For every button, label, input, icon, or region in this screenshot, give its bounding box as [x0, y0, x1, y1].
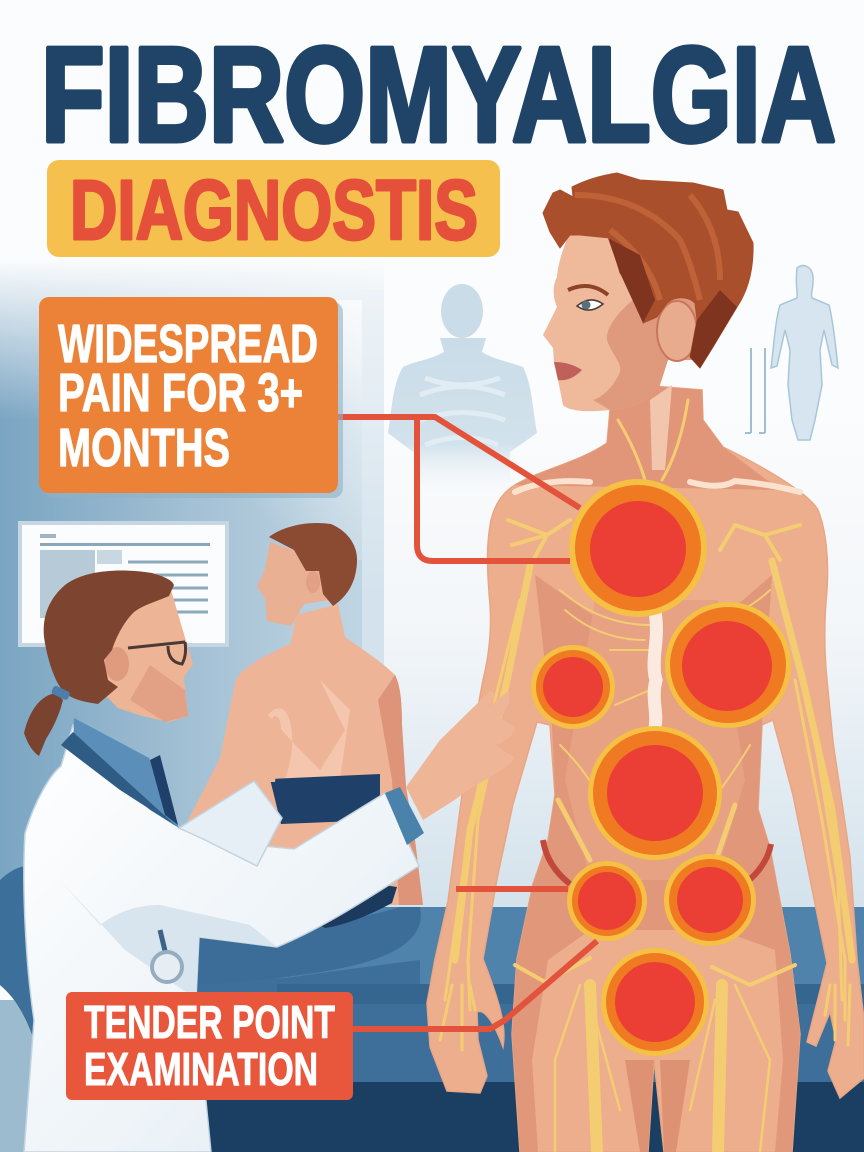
spine [654, 612, 656, 728]
cheek shadow [593, 290, 700, 410]
stethoscope chestpiece [152, 930, 182, 982]
patient face [257, 542, 330, 626]
ghost figure: full body small [745, 266, 838, 440]
callout: widespread pain: PAIN FOR 3+ [58, 363, 303, 423]
wall chart [20, 523, 227, 645]
torso shading [512, 575, 800, 1152]
glasses [128, 642, 186, 664]
pelvic band [543, 840, 771, 884]
callout: tender point examination: EXAMINATION [84, 1043, 318, 1095]
connector lines [338, 417, 597, 1029]
callout: widespread pain: MONTHS [58, 418, 230, 478]
patient hair [269, 523, 357, 606]
subtitle badge: DIAGNOSTIS [70, 163, 478, 257]
tender point 2 [665, 602, 791, 728]
neck shading [515, 385, 780, 490]
patient ear [306, 571, 320, 593]
tender point 3 [531, 645, 615, 729]
pain markers on body [531, 479, 791, 1056]
face [543, 225, 705, 411]
coat shadow folds [60, 880, 277, 999]
blue cuff [385, 787, 424, 845]
patient [184, 523, 423, 928]
shirt and collar [73, 718, 179, 828]
tender point 7 [601, 948, 709, 1056]
callout: widespread pain [39, 297, 343, 498]
waist cloth [270, 774, 380, 824]
doctor hand [406, 691, 515, 820]
ghost figure: torso behind [388, 284, 537, 490]
far sleeve [179, 781, 282, 866]
ponytail [24, 693, 63, 756]
examination table [0, 866, 864, 1152]
hair [543, 173, 753, 368]
tender point 4 [588, 726, 722, 860]
tender point 5 [567, 861, 647, 941]
back [184, 604, 423, 905]
collarbones [515, 481, 800, 492]
doctor head [100, 590, 193, 722]
ear [657, 301, 697, 361]
thigh nerves [515, 958, 795, 985]
callout: widespread pain: WIDESPREAD [58, 314, 318, 374]
doctor [24, 571, 515, 1152]
examiner's hand on back [255, 716, 281, 782]
eye [577, 300, 603, 310]
nerve network overlay [440, 400, 852, 1152]
main figure head and hair [543, 173, 753, 411]
eyebrow [568, 286, 608, 295]
lips [554, 362, 582, 380]
callout: tender point examination: TENDER POINT [84, 996, 335, 1048]
coat body [24, 725, 419, 1152]
lower garment [254, 866, 397, 928]
main figure body [427, 385, 864, 1152]
skin silhouette [427, 385, 864, 1152]
tender point 1 [569, 479, 707, 617]
tender point 6 [664, 854, 756, 946]
doctor hair [44, 571, 174, 704]
callout: tender point examination [66, 992, 353, 1100]
